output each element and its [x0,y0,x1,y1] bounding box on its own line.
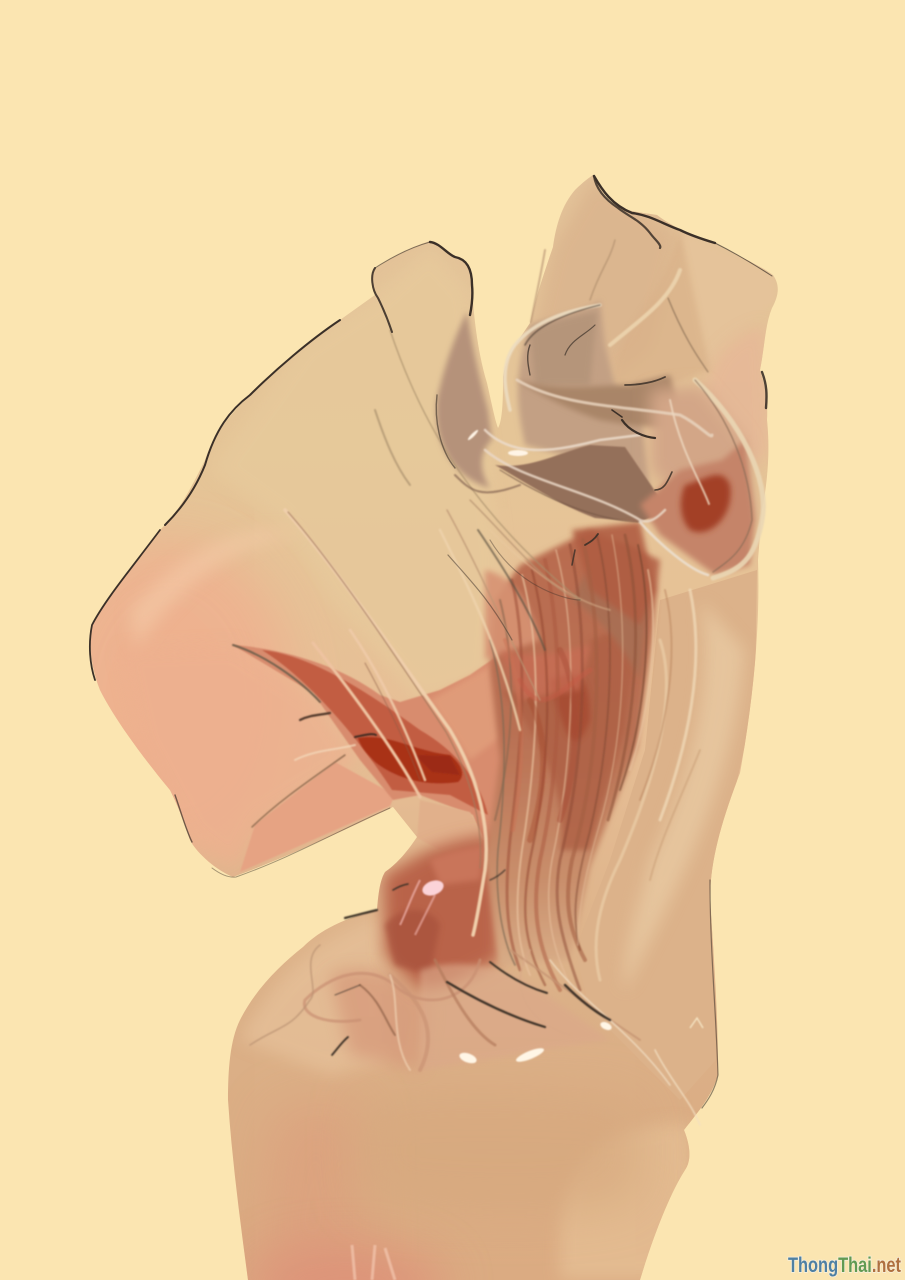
bloom upper tone [538,187,674,367]
artwork: translucent glass figure on cream background [88,174,902,1280]
red ground under the wing [237,645,502,838]
wing soft fold [134,543,242,634]
bloom shaded inner lobe [518,300,650,505]
neck red [383,835,500,990]
clipped colour fields [45,178,775,1280]
left inner lobe [436,312,492,488]
pale pane under wing ridge [418,801,484,840]
salmon patch [433,668,496,758]
dark shoulder lines [332,870,610,1055]
shoulder tendrils [250,945,700,1125]
curl red interior [640,440,755,575]
shoulder bands of the hair [418,962,490,997]
specular highlights [352,429,703,1280]
wing ridges [233,330,580,935]
wing lower pink pane [302,705,344,774]
curl glass ribbons [455,240,763,600]
silhouette base [90,175,778,1280]
glass figure [45,175,778,1280]
red band [262,650,488,815]
body shading [282,1124,344,1226]
deep red pool [358,737,462,783]
hair mass [485,530,660,965]
left wing blush [91,540,284,810]
dark glass edges [90,176,772,1108]
curl right shade [650,385,755,520]
right body column [624,570,757,951]
wing upper light pane [210,245,500,700]
hair strands [490,530,700,990]
dark lower lobe [495,445,668,522]
